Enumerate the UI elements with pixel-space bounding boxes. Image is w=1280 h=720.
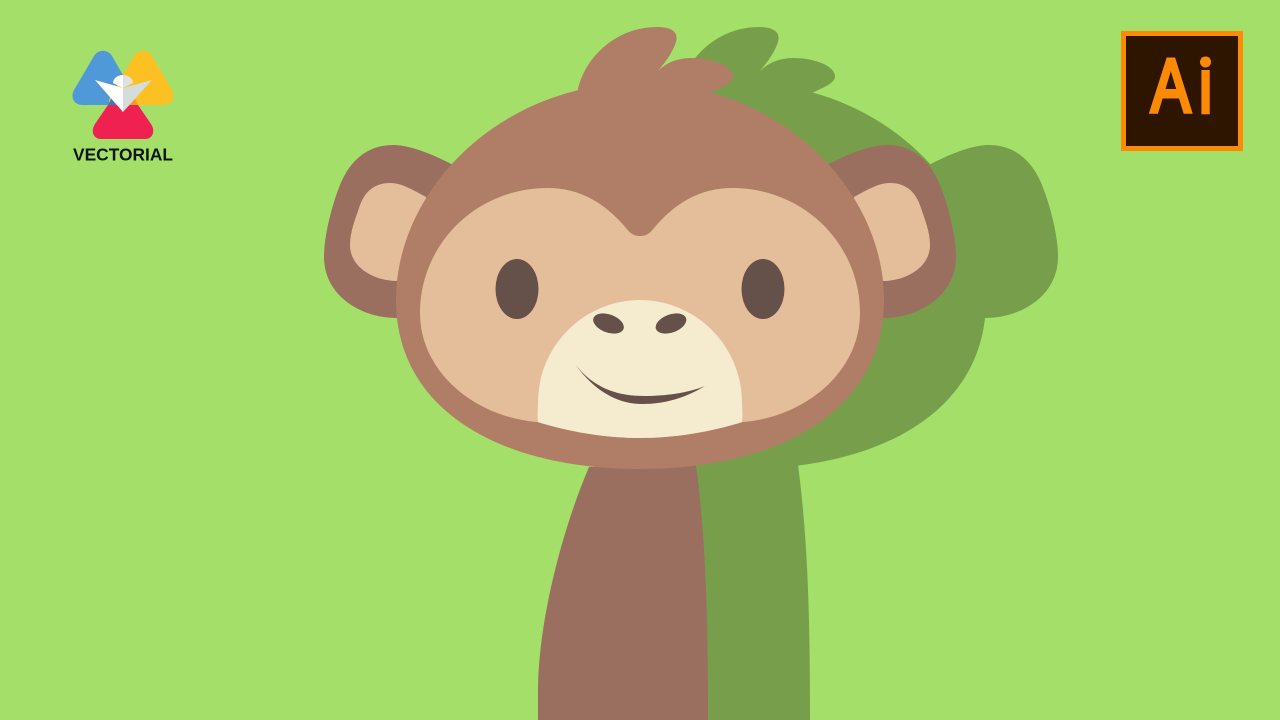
hair tuft	[577, 27, 733, 110]
logo red triangle	[93, 105, 153, 139]
logo blue triangle	[72, 51, 137, 105]
logo wordmark: VECTORIAL	[73, 144, 173, 164]
badge square	[1124, 34, 1240, 148]
muzzle	[538, 300, 742, 438]
Adobe Illustrator badge	[1124, 34, 1240, 148]
logo yellow triangle	[109, 51, 174, 105]
right nostril	[653, 310, 689, 337]
right ear	[810, 145, 956, 318]
left nostril	[590, 310, 627, 337]
logo overlap right	[123, 97, 138, 105]
logo person head	[113, 75, 133, 88]
Vectorial logo	[72, 51, 174, 164]
monkey head	[396, 27, 884, 469]
logo white chevron	[95, 80, 152, 112]
monkey shadow silhouette	[498, 27, 1058, 720]
badge letters: Ai	[1151, 44, 1212, 129]
smile	[575, 364, 705, 404]
logo overlap left	[108, 97, 123, 105]
monkey neck	[538, 465, 708, 720]
right eye	[742, 259, 784, 319]
monkey face	[420, 188, 860, 438]
left eye	[496, 259, 538, 319]
left ear	[324, 145, 470, 318]
badge i dot	[1200, 56, 1211, 68]
